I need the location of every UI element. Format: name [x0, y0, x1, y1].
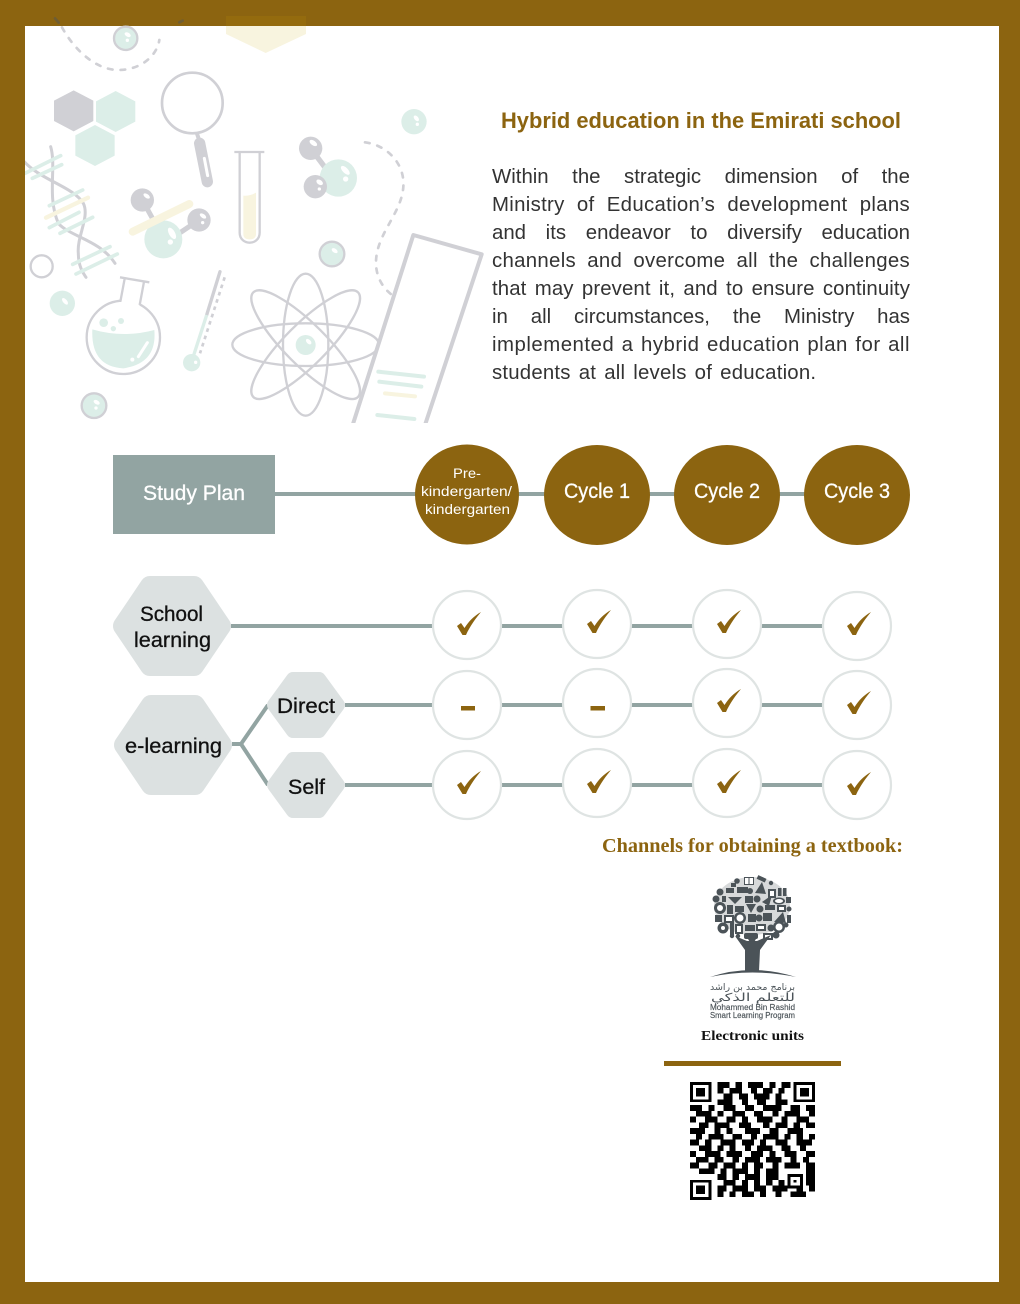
body text block: Within the strategic dimension of the	[492, 166, 910, 188]
box: study plan: Study Plan	[143, 482, 245, 505]
row lines	[231, 626, 860, 785]
dash: direct, cycle 1	[563, 669, 631, 737]
circle: cycle 3: Cycle 3	[824, 480, 890, 503]
circle: cycle 1	[544, 445, 650, 545]
circle: pre-kindergarten	[415, 444, 519, 544]
divider bar	[664, 1061, 841, 1066]
circle: cycle 2: Cycle 2	[694, 480, 760, 503]
icon: pentagon ribbon	[226, 26, 306, 53]
arabic program name: برنامج محمد بن راشد	[710, 983, 795, 993]
check: self, cycle 2	[693, 749, 761, 817]
body text block: and its endeavor to diversify education	[492, 222, 910, 244]
logo: Mohammed Bin Rashid Smart Learning Program	[710, 875, 796, 1020]
hexagon: self: Self	[288, 776, 325, 799]
hexagon: school learning	[123, 586, 221, 666]
icon: test tube	[234, 152, 264, 243]
check: school learning, cycle 3	[823, 592, 891, 660]
hexagon: school learning: learning	[134, 629, 211, 652]
icon: dashed path right	[364, 141, 405, 296]
hexagon: self	[274, 759, 338, 811]
body text block: implemented a hybrid education plan for all	[492, 334, 910, 356]
label: electronic units: Electronic units	[701, 1029, 805, 1044]
english program name: Mohammed Bin Rashid	[710, 1003, 795, 1012]
icon: round flask	[87, 277, 160, 374]
row: direct availability	[433, 669, 891, 739]
icon: tree trunk figure	[735, 934, 771, 971]
alignment square	[788, 1174, 803, 1188]
QR code	[690, 1082, 815, 1200]
check: self, kindergarten	[433, 751, 501, 819]
header: study plan row connectors	[275, 492, 810, 496]
circle: cycle 1: Cycle 1	[564, 480, 630, 503]
icon: DNA helix	[23, 147, 117, 277]
body text block	[492, 166, 910, 384]
hexagon: e-learning: e-learning	[125, 735, 222, 758]
icon: tree canopy	[712, 875, 792, 940]
circle: pre-kindergarten: Pre-	[453, 466, 481, 481]
body text block: that may prevent it, and to ensure continuity	[492, 278, 910, 300]
icon: mint drop	[401, 109, 427, 134]
circle: pre-kindergarten: kindergarten/	[421, 484, 512, 499]
check: self, cycle 3	[823, 751, 891, 819]
icon: hexagons	[54, 90, 135, 166]
icon: bubble middle	[320, 242, 344, 266]
arabic program name: للتعلم الذكي	[711, 991, 795, 1004]
check: direct, cycle 2	[693, 669, 761, 737]
icon: mint bubble left	[50, 291, 75, 316]
check: school learning, cycle 2	[693, 590, 761, 658]
hexagon: direct: Direct	[277, 695, 335, 718]
icon: molecule right	[299, 137, 357, 198]
icon: thermometer	[183, 272, 225, 371]
circle: pre-kindergarten: kindergarten	[425, 502, 510, 517]
check: school learning, cycle 1	[563, 590, 631, 658]
circle: cycle 2	[674, 445, 780, 545]
decorative science illustration	[23, 16, 482, 425]
body text block: in all circumstances, the Ministry has	[492, 306, 910, 328]
icon: magnifying glass	[162, 73, 223, 182]
icon: ground arc	[710, 970, 796, 977]
row: school learning availability	[433, 590, 891, 660]
icon: atom	[232, 274, 379, 416]
box: study plan	[113, 455, 275, 534]
heading: channels for obtaining a textbook: Channels for obtaining a textbook:	[602, 836, 903, 857]
finder squares	[690, 1082, 815, 1200]
title: Hybrid education in the Emirati school	[501, 108, 901, 133]
connector: e-learning branches	[232, 705, 268, 785]
icon: cylinder	[353, 235, 482, 425]
check: school learning, kindergarten	[433, 591, 501, 659]
check: direct, cycle 3	[823, 671, 891, 739]
check: self, cycle 1	[563, 749, 631, 817]
data modules	[690, 1085, 815, 1194]
icon: small ring	[31, 255, 53, 277]
row: self availability	[433, 749, 891, 819]
circle: cycle 3	[804, 445, 910, 545]
hexagon: direct	[274, 679, 338, 731]
icon: bubble top	[114, 27, 137, 50]
body text block: Ministry of Education’s development plans	[492, 194, 910, 216]
dash: direct, kindergarten	[433, 671, 501, 739]
english program name: Smart Learning Program	[710, 1011, 795, 1020]
icon: dashed path top	[55, 18, 183, 70]
icon: molecule left	[131, 188, 211, 258]
body text block: students at all levels of education.	[492, 362, 816, 384]
body text block: channels and overcome all the challenges	[492, 250, 910, 272]
hexagon: e-learning	[124, 705, 222, 785]
icon: bubble bottom	[82, 393, 106, 418]
hexagon: school learning: School	[140, 603, 203, 626]
